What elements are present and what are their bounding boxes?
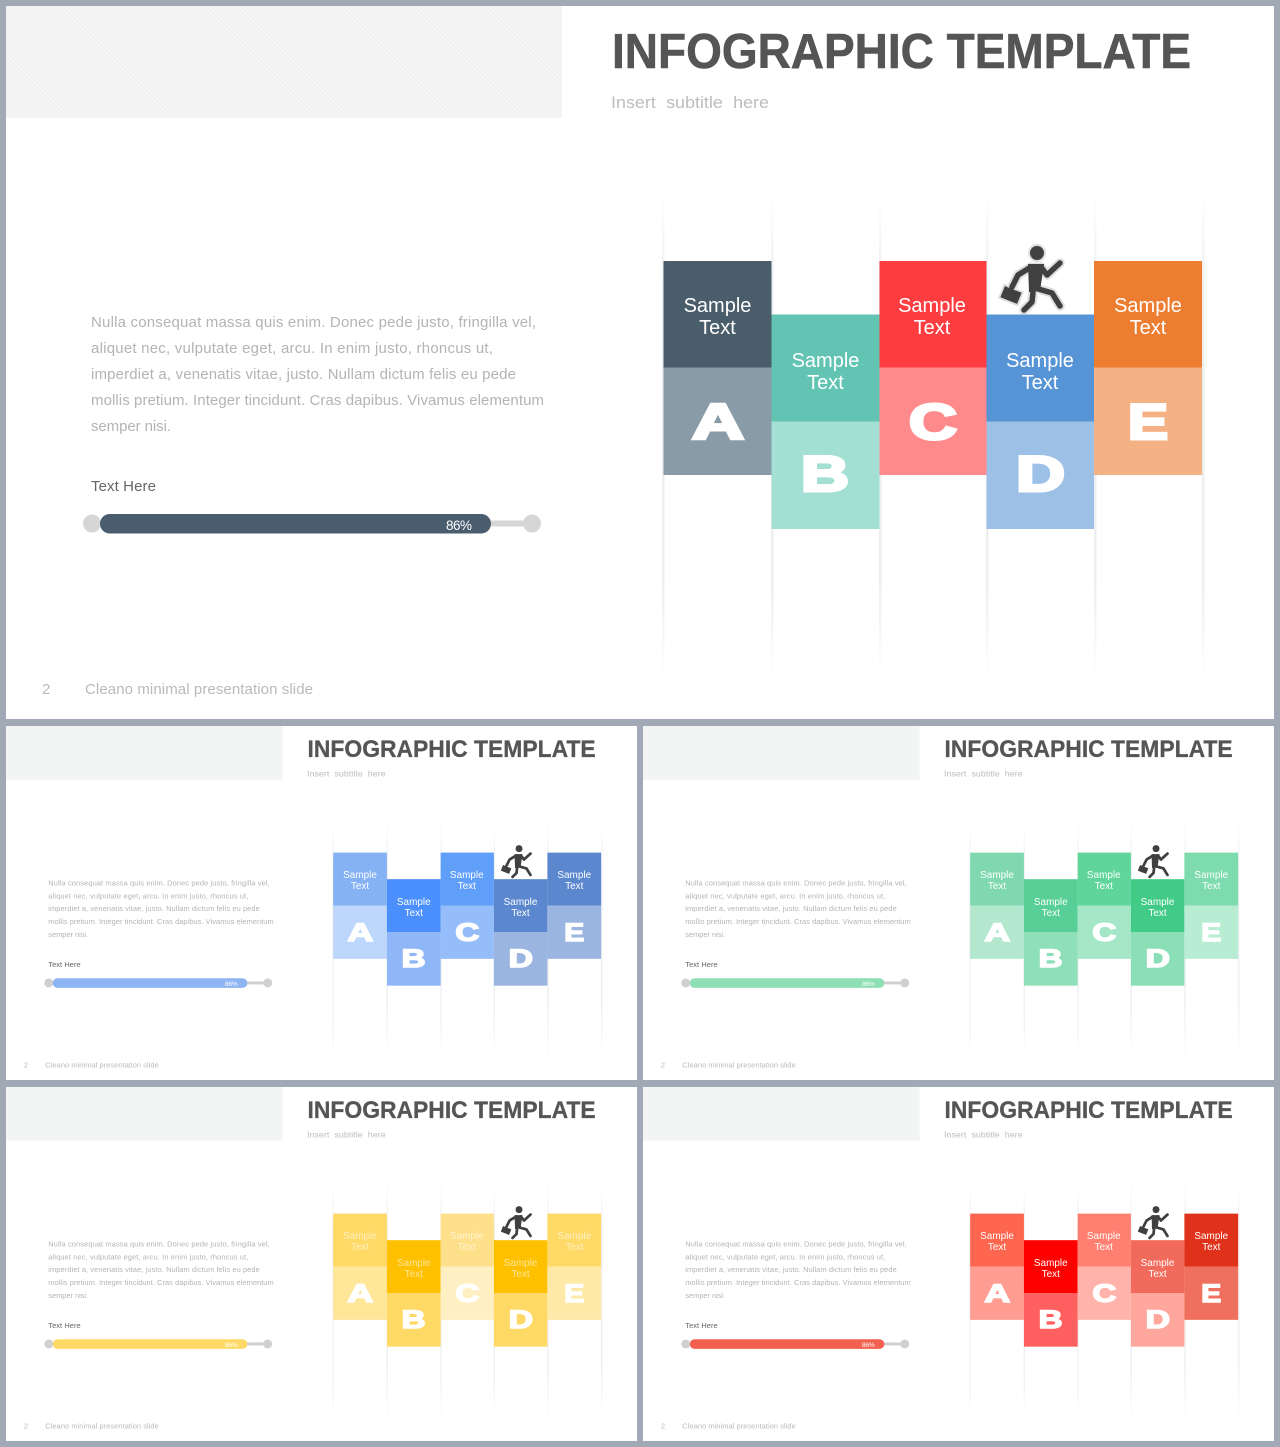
column C: Text (458, 1242, 476, 1253)
body paragraph: imperdiet a, venenatis vitae, justo. Nullam dictum felis eu pede (91, 366, 516, 383)
column D: Sample (504, 1258, 538, 1269)
header panel (6, 1087, 283, 1141)
column B: Sample (1034, 1258, 1068, 1269)
body paragraph: mollis pretium. Integer tincidunt. Cras dapibus. Vivamus elementum (91, 392, 544, 409)
column E: E (564, 920, 584, 947)
body paragraph: mollis pretium. Integer tincidunt. Cras dapibus. Vivamus elementum (685, 1278, 911, 1287)
footer: Cleano minimal presentation slide (85, 681, 313, 698)
title: INFOGRAPHIC TEMPLATE (612, 25, 1191, 79)
body paragraph: semper nisi. (685, 1291, 725, 1300)
icon: running businessman (1000, 244, 1060, 310)
column E: E (1201, 1281, 1221, 1308)
column E (1184, 1214, 1238, 1320)
subtitle: Insert subtitle here (307, 769, 386, 779)
column C: C (1092, 1281, 1116, 1308)
column A: Sample (343, 1231, 377, 1242)
column D: D (509, 1307, 533, 1334)
column E: Sample (1194, 1231, 1229, 1242)
title: INFOGRAPHIC TEMPLATE (945, 736, 1233, 763)
column A: Sample (343, 870, 377, 881)
column B: Text (807, 372, 844, 394)
column E (1094, 261, 1202, 475)
column C: C (455, 920, 479, 947)
subtitle: Insert subtitle here (611, 93, 769, 112)
column D: Text (511, 908, 530, 919)
icon: running businessman (1138, 1206, 1167, 1238)
column B (1024, 879, 1078, 986)
column A (970, 1214, 1024, 1320)
body paragraph: Nulla consequat massa quis enim. Donec pede justo, fringilla vel, (685, 878, 907, 887)
column C: Sample (450, 1231, 484, 1242)
column B (1024, 1240, 1078, 1347)
body paragraph: semper nisi. (91, 418, 171, 435)
title: INFOGRAPHIC TEMPLATE (308, 736, 596, 763)
progress bar 86%: 86% (862, 1342, 875, 1349)
column D: Text (511, 1269, 530, 1280)
body paragraph: mollis pretium. Integer tincidunt. Cras dapibus. Vivamus elementum (685, 917, 911, 926)
body paragraph: aliquet nec, vulputate eget, arcu. In enim justo, rhoncus ut, (48, 891, 248, 900)
body paragraph: mollis pretium. Integer tincidunt. Cras dapibus. Vivamus elementum (48, 1278, 274, 1287)
column D: Text (1022, 372, 1059, 394)
body paragraph: aliquet nec, vulputate eget, arcu. In enim justo, rhoncus ut, (91, 340, 493, 357)
header hatch panel (6, 6, 562, 118)
footer: 2 (661, 1422, 665, 1431)
body paragraph: imperdiet a, venenatis vitae, justo. Nullam dictum felis eu pede (48, 904, 260, 913)
progress label: Text Here (91, 478, 156, 495)
column D: D (1146, 1307, 1170, 1334)
slide: main dark theme (6, 6, 1274, 719)
column E: Text (1130, 317, 1167, 339)
progress bar 86% (44, 978, 272, 988)
header panel (643, 726, 920, 780)
column D (494, 1240, 547, 1347)
progress bar 86%: 86% (225, 1342, 238, 1349)
column A (970, 853, 1024, 959)
body paragraph: imperdiet a, venenatis vitae, justo. Nullam dictum felis eu pede (685, 1265, 897, 1274)
column E (547, 1214, 601, 1320)
progress bar 86%: 86% (446, 518, 472, 533)
progress bar 86%: 86% (862, 981, 875, 988)
column A: A (347, 920, 373, 947)
slide: red theme (643, 1087, 1274, 1441)
column guide lines (332, 817, 602, 1061)
column C: Sample (1087, 1231, 1121, 1242)
body paragraph (91, 314, 544, 435)
column A: Text (988, 1242, 1006, 1253)
column guide lines (332, 1178, 602, 1422)
body paragraph: mollis pretium. Integer tincidunt. Cras dapibus. Vivamus elementum (48, 917, 274, 926)
column A: Text (351, 1242, 369, 1253)
column D: D (1016, 446, 1065, 502)
column A: A (984, 920, 1010, 947)
column E: E (1128, 394, 1168, 450)
column B (387, 1240, 441, 1347)
column D: D (1146, 946, 1170, 973)
column guide lines (969, 1178, 1239, 1422)
column B (772, 314, 880, 529)
column D: Text (1148, 908, 1167, 919)
progress label: Text Here (48, 960, 81, 969)
column D: Sample (1141, 897, 1175, 908)
footer: 2 (24, 1422, 28, 1431)
column B: B (402, 1307, 425, 1334)
icon: running businessman (1138, 845, 1167, 877)
body paragraph: imperdiet a, venenatis vitae, justo. Nullam dictum felis eu pede (48, 1265, 260, 1274)
column D (1131, 879, 1184, 986)
column E: Sample (1114, 295, 1182, 317)
column E: E (564, 1281, 584, 1308)
body paragraph: Nulla consequat massa quis enim. Donec pede justo, fringilla vel, (685, 1239, 907, 1248)
column A: A (692, 394, 744, 450)
column E: Text (565, 881, 584, 892)
slide: green theme (643, 726, 1274, 1080)
progress label: Text Here (48, 1321, 81, 1330)
column C: Text (914, 317, 951, 339)
column C (880, 261, 986, 475)
column A: Sample (980, 1231, 1014, 1242)
body paragraph: Nulla consequat massa quis enim. Donec pede justo, fringilla vel, (48, 878, 270, 887)
progress bar 86% (681, 1339, 909, 1349)
column B: Text (1042, 1269, 1060, 1280)
column B: Text (405, 1269, 423, 1280)
header panel (6, 726, 283, 780)
body paragraph: semper nisi. (48, 930, 88, 939)
footer: Cleano minimal presentation slide (45, 1422, 159, 1431)
slide: blue theme (6, 726, 637, 1080)
column B: B (801, 446, 849, 502)
title: INFOGRAPHIC TEMPLATE (945, 1097, 1233, 1124)
column A (664, 261, 772, 475)
column B: Sample (397, 1258, 431, 1269)
column C (441, 1214, 494, 1320)
body paragraph: semper nisi. (48, 1291, 88, 1300)
column C (441, 853, 494, 959)
column A: Text (351, 881, 369, 892)
progress label: Text Here (685, 1321, 718, 1330)
subtitle: Insert subtitle here (944, 769, 1023, 779)
footer: Cleano minimal presentation slide (682, 1061, 796, 1070)
column C (1078, 1214, 1131, 1320)
progress bar 86% (681, 978, 909, 988)
body paragraph (685, 878, 911, 939)
progress bar 86% (83, 514, 541, 534)
column B: Sample (792, 350, 859, 372)
column D (986, 314, 1094, 529)
footer: Cleano minimal presentation slide (682, 1422, 796, 1431)
body paragraph (48, 878, 274, 939)
column A: Text (699, 317, 736, 339)
column E (547, 853, 601, 959)
column C: Sample (898, 295, 966, 317)
title: INFOGRAPHIC TEMPLATE (308, 1097, 596, 1124)
column C: Text (1095, 1242, 1113, 1253)
column B: Text (405, 908, 423, 919)
progress bar 86% (44, 1339, 272, 1349)
column A: A (347, 1281, 373, 1308)
column E: Sample (557, 1231, 592, 1242)
column E: Text (1202, 881, 1221, 892)
body paragraph: Nulla consequat massa quis enim. Donec pede justo, fringilla vel, (91, 314, 536, 331)
column C: Text (1095, 881, 1113, 892)
progress bar 86%: 86% (225, 981, 238, 988)
body paragraph (48, 1239, 274, 1300)
column guide lines (662, 190, 1204, 680)
subtitle: Insert subtitle here (944, 1130, 1023, 1140)
column A (333, 853, 387, 959)
column B: Sample (1034, 897, 1068, 908)
column D: Sample (1006, 350, 1074, 372)
footer: 2 (24, 1061, 28, 1070)
footer: 2 (42, 681, 50, 698)
body paragraph: aliquet nec, vulputate eget, arcu. In enim justo, rhoncus ut, (685, 1252, 885, 1261)
column A (333, 1214, 387, 1320)
body paragraph: semper nisi. (685, 930, 725, 939)
body paragraph: aliquet nec, vulputate eget, arcu. In enim justo, rhoncus ut, (48, 1252, 248, 1261)
body paragraph: aliquet nec, vulputate eget, arcu. In enim justo, rhoncus ut, (685, 891, 885, 900)
column E (1184, 853, 1238, 959)
column D: Sample (1141, 1258, 1175, 1269)
column D: Sample (504, 897, 538, 908)
footer: 2 (661, 1061, 665, 1070)
column A: Text (988, 881, 1006, 892)
column D: Text (1148, 1269, 1167, 1280)
column C: Text (458, 881, 476, 892)
progress label: Text Here (685, 960, 718, 969)
subtitle: Insert subtitle here (307, 1130, 386, 1140)
column A: Sample (980, 870, 1014, 881)
column B: B (1039, 946, 1062, 973)
column C: Sample (1087, 870, 1121, 881)
column D (494, 879, 547, 986)
column C: C (909, 394, 957, 450)
column E: Sample (1194, 870, 1229, 881)
body paragraph (685, 1239, 911, 1300)
column B: Sample (397, 897, 431, 908)
column A: A (984, 1281, 1010, 1308)
column A: Sample (684, 295, 751, 317)
slide: yellow theme (6, 1087, 637, 1441)
column C (1078, 853, 1131, 959)
icon: running businessman (501, 845, 530, 877)
footer: Cleano minimal presentation slide (45, 1061, 159, 1070)
body paragraph: imperdiet a, venenatis vitae, justo. Nullam dictum felis eu pede (685, 904, 897, 913)
column E: E (1201, 920, 1221, 947)
header panel (643, 1087, 920, 1141)
column D (1131, 1240, 1184, 1347)
column E: Text (1202, 1242, 1221, 1253)
icon: running businessman (501, 1206, 530, 1238)
column B: B (1039, 1307, 1062, 1334)
body paragraph: Nulla consequat massa quis enim. Donec pede justo, fringilla vel, (48, 1239, 270, 1248)
column guide lines (969, 817, 1239, 1061)
column B: B (402, 946, 425, 973)
column E: Sample (557, 870, 592, 881)
column C: C (1092, 920, 1116, 947)
column E: Text (565, 1242, 584, 1253)
column B: Text (1042, 908, 1060, 919)
column B (387, 879, 441, 986)
column C: C (455, 1281, 479, 1308)
column C: Sample (450, 870, 484, 881)
column D: D (509, 946, 533, 973)
